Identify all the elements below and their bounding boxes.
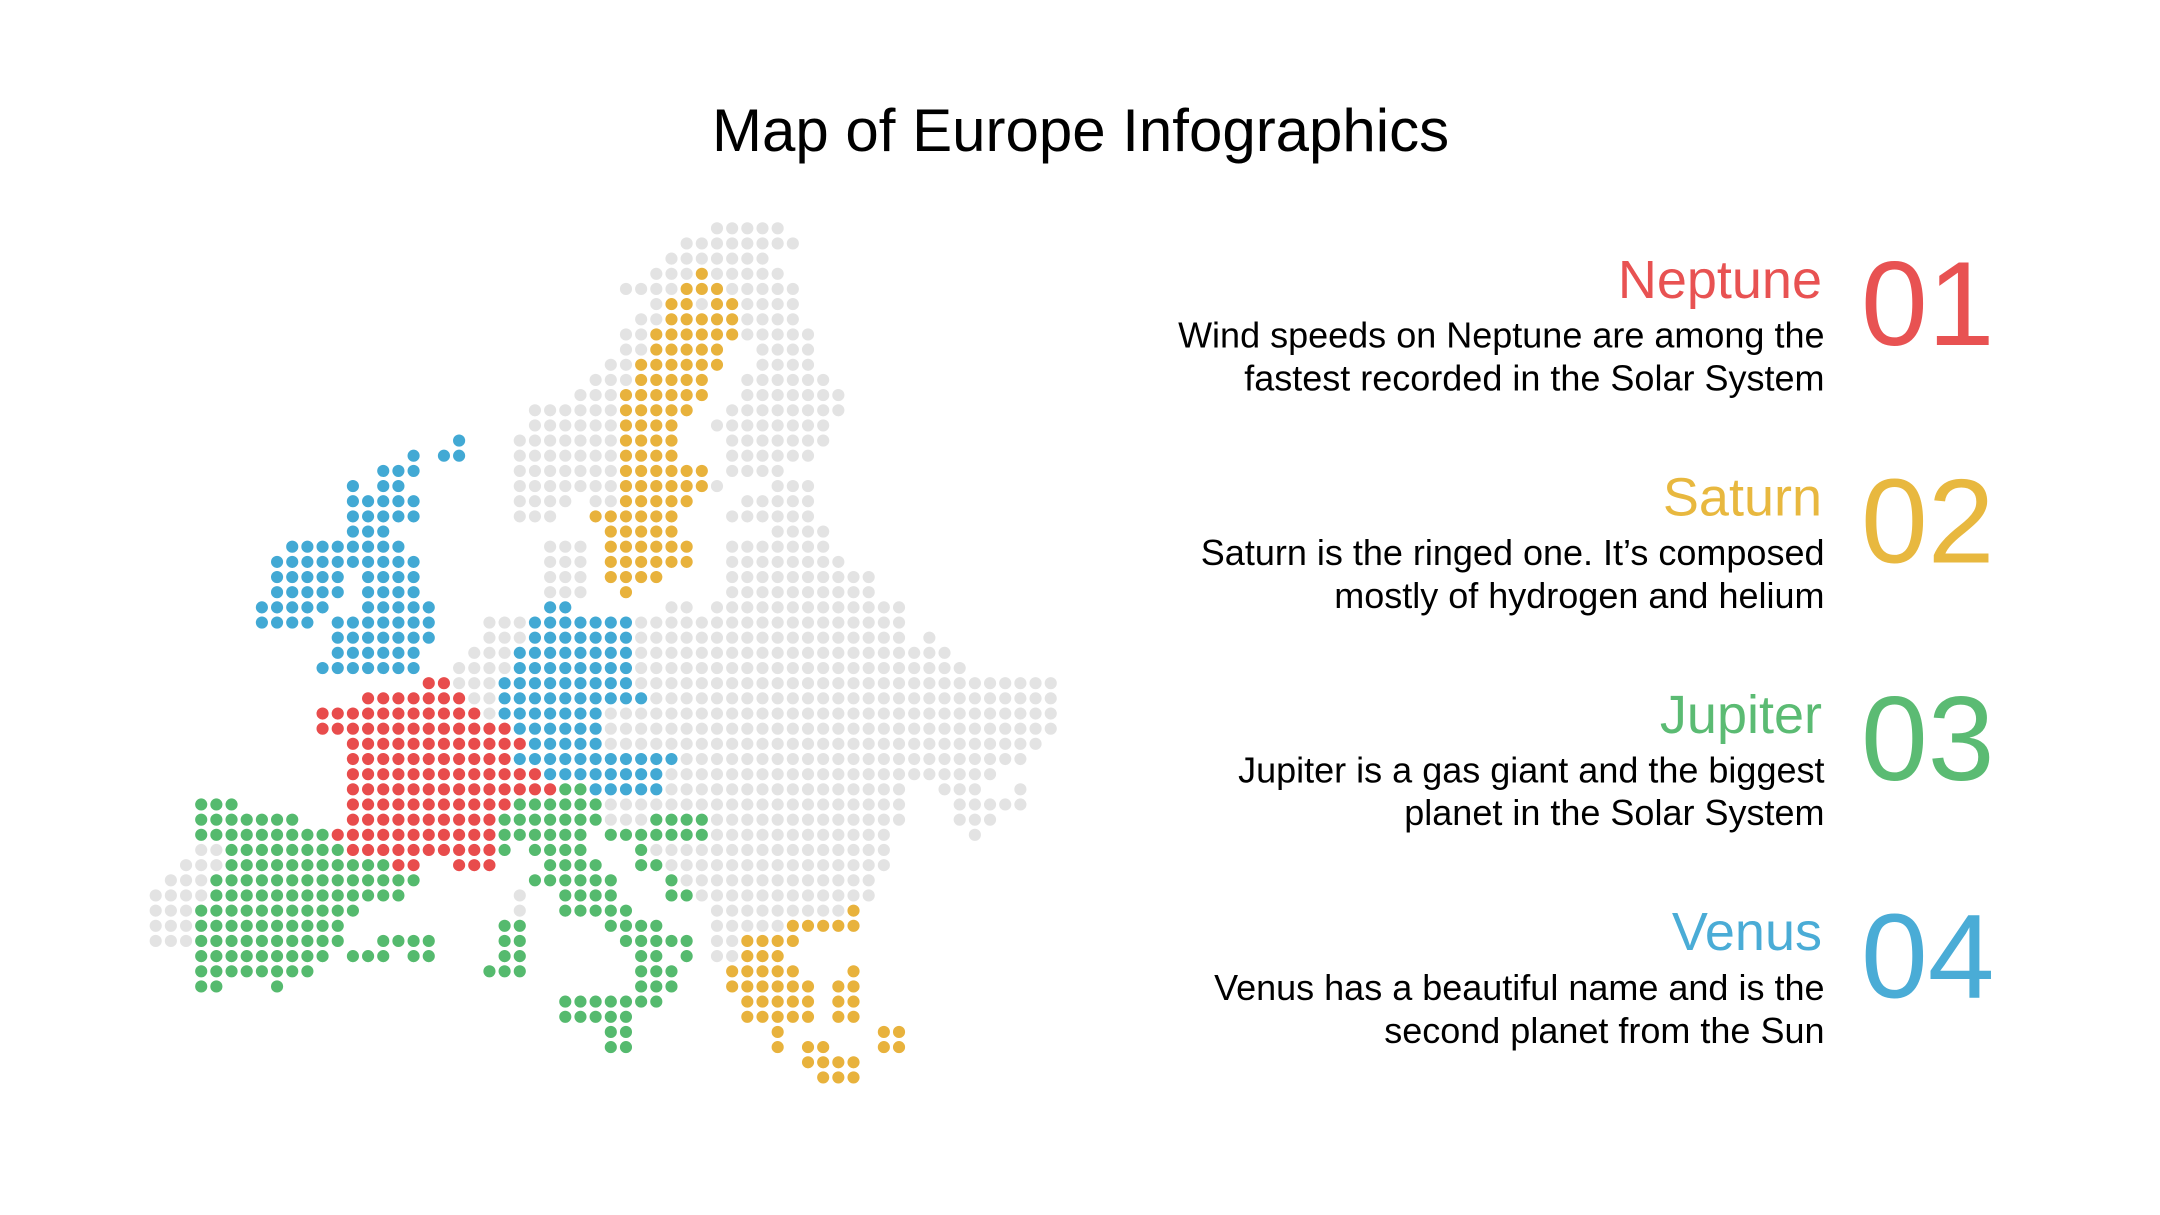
dots: Neptune region xyxy=(323,683,550,865)
number 02: 02 xyxy=(1861,455,1994,589)
number 04: 04 xyxy=(1861,889,1994,1023)
dots: unhighlighted countries xyxy=(156,228,1051,956)
heading: Jupiter: Jupiter xyxy=(1660,685,1822,745)
dots: Saturn region xyxy=(596,274,899,1077)
text: Saturn description: Saturn is the ringed one. It’s composed xyxy=(1201,532,1824,573)
panel: Venus xyxy=(1214,889,1994,1051)
text: Jupiter description: planet in the Solar System xyxy=(1404,792,1824,833)
panel: Saturn xyxy=(1201,455,1994,616)
number 03: 03 xyxy=(1861,672,1994,806)
heading: Neptune: Neptune xyxy=(1618,250,1822,310)
heading: Saturn: Saturn xyxy=(1663,467,1822,527)
dots: Venus region xyxy=(262,441,672,789)
text: Venus description: second planet from the Sun xyxy=(1384,1010,1824,1051)
text: Neptune description: Wind speeds on Neptune are among the xyxy=(1178,314,1824,356)
title: Map of Europe Infographics xyxy=(712,97,1449,164)
panel: Neptune xyxy=(1178,237,1994,398)
text: Neptune description: fastest recorded in the Solar System xyxy=(1244,357,1824,398)
number 01: 01 xyxy=(1861,237,1994,371)
heading: Venus: Venus xyxy=(1672,902,1822,962)
text: Jupiter description: Jupiter is a gas giant and the biggest xyxy=(1238,749,1824,790)
panel: Jupiter xyxy=(1238,672,1994,833)
text: Venus description: Venus has a beautiful name and is the xyxy=(1214,967,1824,1008)
dots: Jupiter region xyxy=(201,789,702,1047)
dot map of Europe xyxy=(156,228,1051,1077)
text: Saturn description: mostly of hydrogen and helium xyxy=(1334,575,1824,616)
